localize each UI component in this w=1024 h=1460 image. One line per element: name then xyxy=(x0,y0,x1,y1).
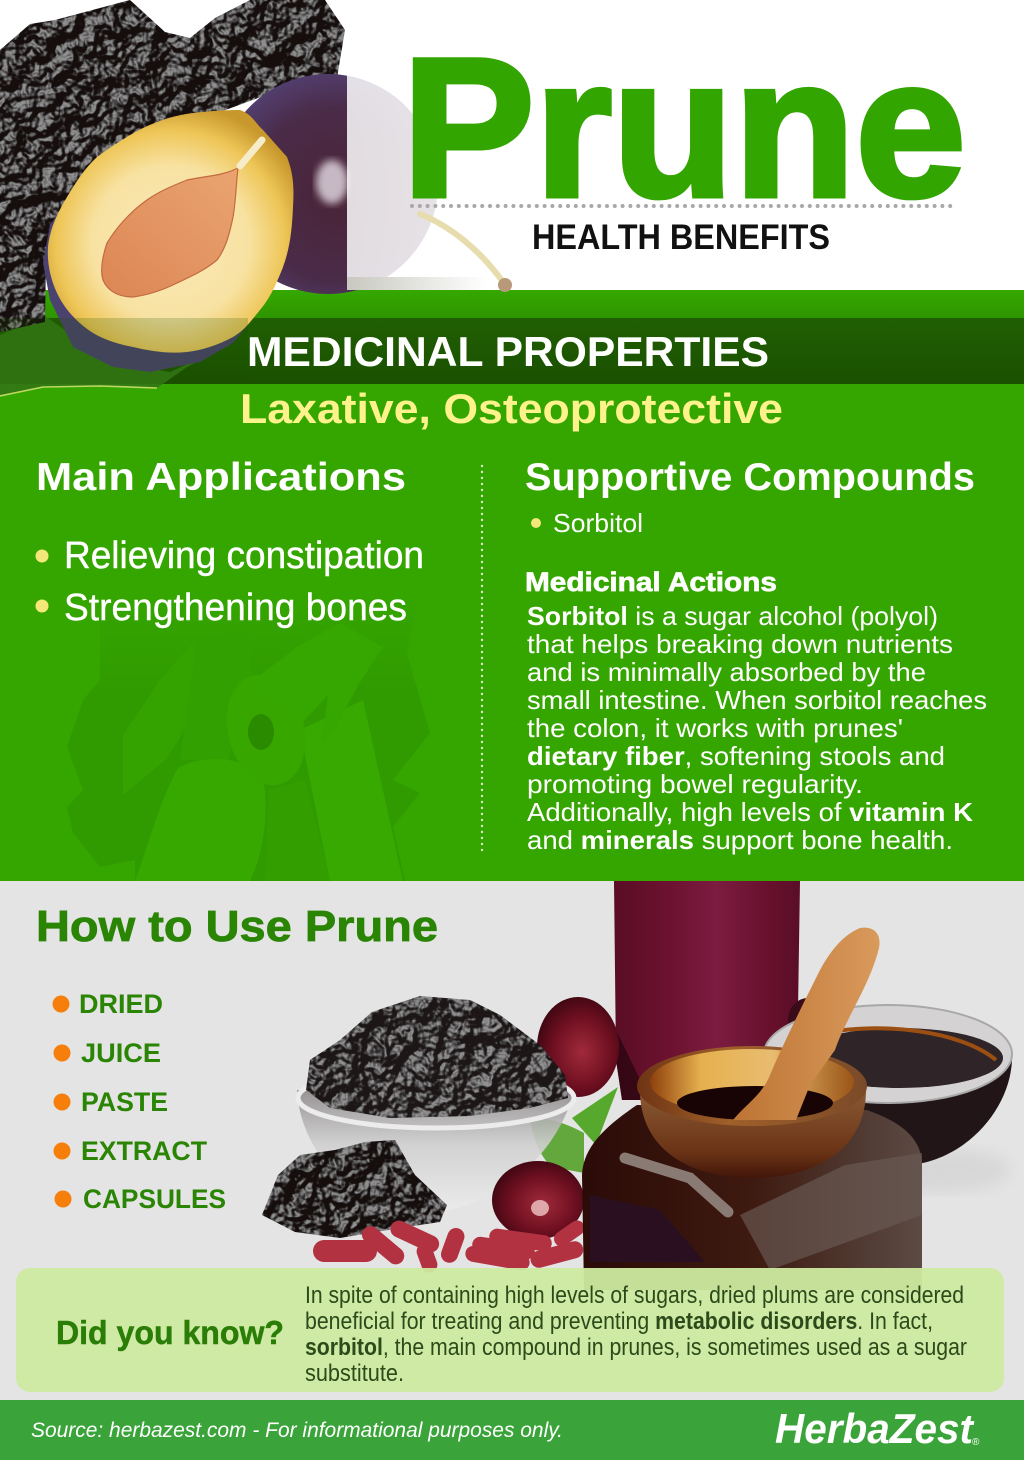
illustration: prune products xyxy=(262,881,1012,1290)
jar grey right panel xyxy=(740,1153,922,1270)
torso highlight xyxy=(180,630,252,760)
item: EXTRACT xyxy=(81,1136,207,1166)
callout text: substitute. xyxy=(305,1360,404,1387)
bullet xyxy=(36,550,48,562)
capsule xyxy=(529,1239,585,1270)
medicinal actions paragraph: dietary fiber , softening stools and xyxy=(527,741,945,771)
heading: Supportive Compounds xyxy=(525,456,975,499)
jar highlight xyxy=(625,1158,728,1212)
medicinal actions paragraph: and minerals support bone health. xyxy=(527,825,953,855)
medicinal actions heading: Medicinal Actions xyxy=(525,567,777,597)
leaves xyxy=(572,1087,618,1145)
grey how to use background xyxy=(0,881,1024,1400)
illustration: prunes and plums xyxy=(0,0,587,396)
capsule xyxy=(471,1236,536,1260)
capsule xyxy=(414,1241,440,1275)
capsule xyxy=(551,1218,588,1249)
whole plum xyxy=(218,74,438,294)
callout text: sorbitol, the main compound in prunes, is sometimes used as a sugar xyxy=(305,1334,967,1361)
medicinal actions paragraph xyxy=(527,601,987,855)
green top strip xyxy=(0,290,1024,318)
bullet xyxy=(54,1044,70,1062)
medicinal actions paragraph: that helps breaking down nutrients xyxy=(527,629,953,659)
plum behind bottle xyxy=(537,997,619,1097)
prunes in bowl xyxy=(306,996,568,1118)
callout text xyxy=(305,1282,967,1387)
wooden spoon xyxy=(733,928,880,1120)
bullet xyxy=(52,996,70,1012)
vertical dotted divider xyxy=(481,466,483,855)
extract bowl rim xyxy=(764,1005,1012,1103)
paste jar body xyxy=(582,1105,922,1290)
capsule xyxy=(464,1245,531,1272)
stem tip xyxy=(498,278,512,292)
extract liquid xyxy=(797,1028,1003,1088)
liquid amber edge xyxy=(825,1028,996,1060)
bullet xyxy=(36,600,48,612)
extract bowl body xyxy=(765,1060,1012,1165)
knee xyxy=(135,759,266,881)
toilet roll hole xyxy=(248,714,274,750)
medicinal actions paragraph: the colon, it works with prunes' xyxy=(527,713,903,743)
panel: main applications xyxy=(36,456,424,629)
capsule xyxy=(313,1240,377,1262)
paper strip xyxy=(300,700,403,881)
bottle dark base reflection xyxy=(616,1010,798,1100)
dotted divider under title xyxy=(412,204,958,208)
juice bottle xyxy=(614,881,800,1100)
item: PASTE xyxy=(81,1087,168,1117)
footer bar xyxy=(0,1400,1024,1460)
application item: Relieving constipation xyxy=(64,535,424,577)
subheading: properties: Laxative, Osteoprotective xyxy=(240,385,783,432)
dried prunes pile xyxy=(0,0,345,332)
medicinal properties dark band xyxy=(0,318,1024,384)
plum highlight xyxy=(316,160,348,204)
left sleeve fold xyxy=(123,640,197,795)
item: JUICE xyxy=(81,1038,161,1068)
registered mark: ® xyxy=(972,1437,980,1448)
heading: Main Applications xyxy=(36,456,406,499)
halved plum skin xyxy=(43,110,293,372)
heading: how to use prune: How to Use Prune xyxy=(36,902,438,951)
leaf bright edge xyxy=(0,386,157,396)
callout heading: Did you know? xyxy=(56,1314,284,1351)
capsule xyxy=(388,1218,442,1255)
application item: Strengthening bones xyxy=(64,587,407,629)
medicinal actions paragraph: and is minimally absorbed by the xyxy=(527,657,926,687)
medicinal actions paragraph: Sorbitol is a sugar alcohol (polyol) xyxy=(527,601,938,631)
glass bowl rim xyxy=(298,1068,574,1128)
green medicinal section background xyxy=(0,290,1024,881)
figure sleeves and torso xyxy=(67,600,430,881)
panel: supportive compounds xyxy=(525,456,987,855)
jar rim outer xyxy=(637,1046,867,1126)
callout: did you know xyxy=(16,1268,1004,1392)
HerbaZest logo: HerbaZest xyxy=(775,1405,975,1452)
background figure holding toilet paper xyxy=(67,600,430,881)
jar opening xyxy=(677,1086,833,1120)
jar purple reflection xyxy=(590,1195,705,1262)
leaf front xyxy=(530,1118,584,1173)
jar neck xyxy=(640,1090,866,1178)
medicinal actions paragraph: Additionally, high levels of vitamin K xyxy=(527,797,973,827)
hand xyxy=(253,623,383,742)
plum seed stalk highlight xyxy=(240,140,262,166)
compound item: Sorbitol xyxy=(553,508,643,538)
plum stem xyxy=(420,214,503,282)
plum shine xyxy=(531,1200,549,1216)
medicinal actions paragraph: small intestine. When sorbitol reaches xyxy=(527,685,987,715)
glass bowl xyxy=(297,1090,574,1213)
item: CAPSULES xyxy=(83,1184,226,1214)
capsules xyxy=(313,1218,588,1275)
bullet xyxy=(531,518,541,528)
band tint over plum xyxy=(0,318,248,384)
right leg xyxy=(265,780,330,881)
item: DRIED xyxy=(79,989,163,1019)
header background xyxy=(0,0,1024,290)
capsule xyxy=(439,1226,467,1265)
loose prunes xyxy=(262,1140,447,1238)
capsule xyxy=(488,1228,553,1252)
bullet xyxy=(54,1142,70,1160)
callout panel xyxy=(16,1268,1004,1392)
ground shadow xyxy=(870,1148,1010,1192)
bullet xyxy=(54,1190,72,1208)
title: Prune: Prune xyxy=(402,17,966,238)
list: forms of use xyxy=(52,989,226,1214)
leaf xyxy=(0,316,232,396)
white fade overlay xyxy=(347,0,587,277)
bullet xyxy=(54,1094,70,1110)
red plum xyxy=(492,1161,584,1239)
jar amber lining xyxy=(650,1049,854,1115)
medicinal actions paragraph: promoting bowel regularity. xyxy=(527,769,863,799)
halved plum flesh xyxy=(48,110,293,353)
heading: medicinal properties: MEDICINAL PROPERTIES xyxy=(247,328,769,375)
subtitle: HEALTH BENEFITS xyxy=(532,218,830,257)
capsule xyxy=(358,1223,408,1268)
plum seed xyxy=(102,168,238,297)
toilet roll xyxy=(216,666,316,794)
footer xyxy=(0,1400,1024,1460)
plum behind bowl of extract xyxy=(788,998,828,1042)
source note: Source: herbazest.com - For informational purposes only. xyxy=(31,1419,563,1442)
callout text: beneficial for treating and preventing metabolic disorders. In fact, xyxy=(305,1308,933,1335)
plum soft shadow xyxy=(347,277,487,290)
